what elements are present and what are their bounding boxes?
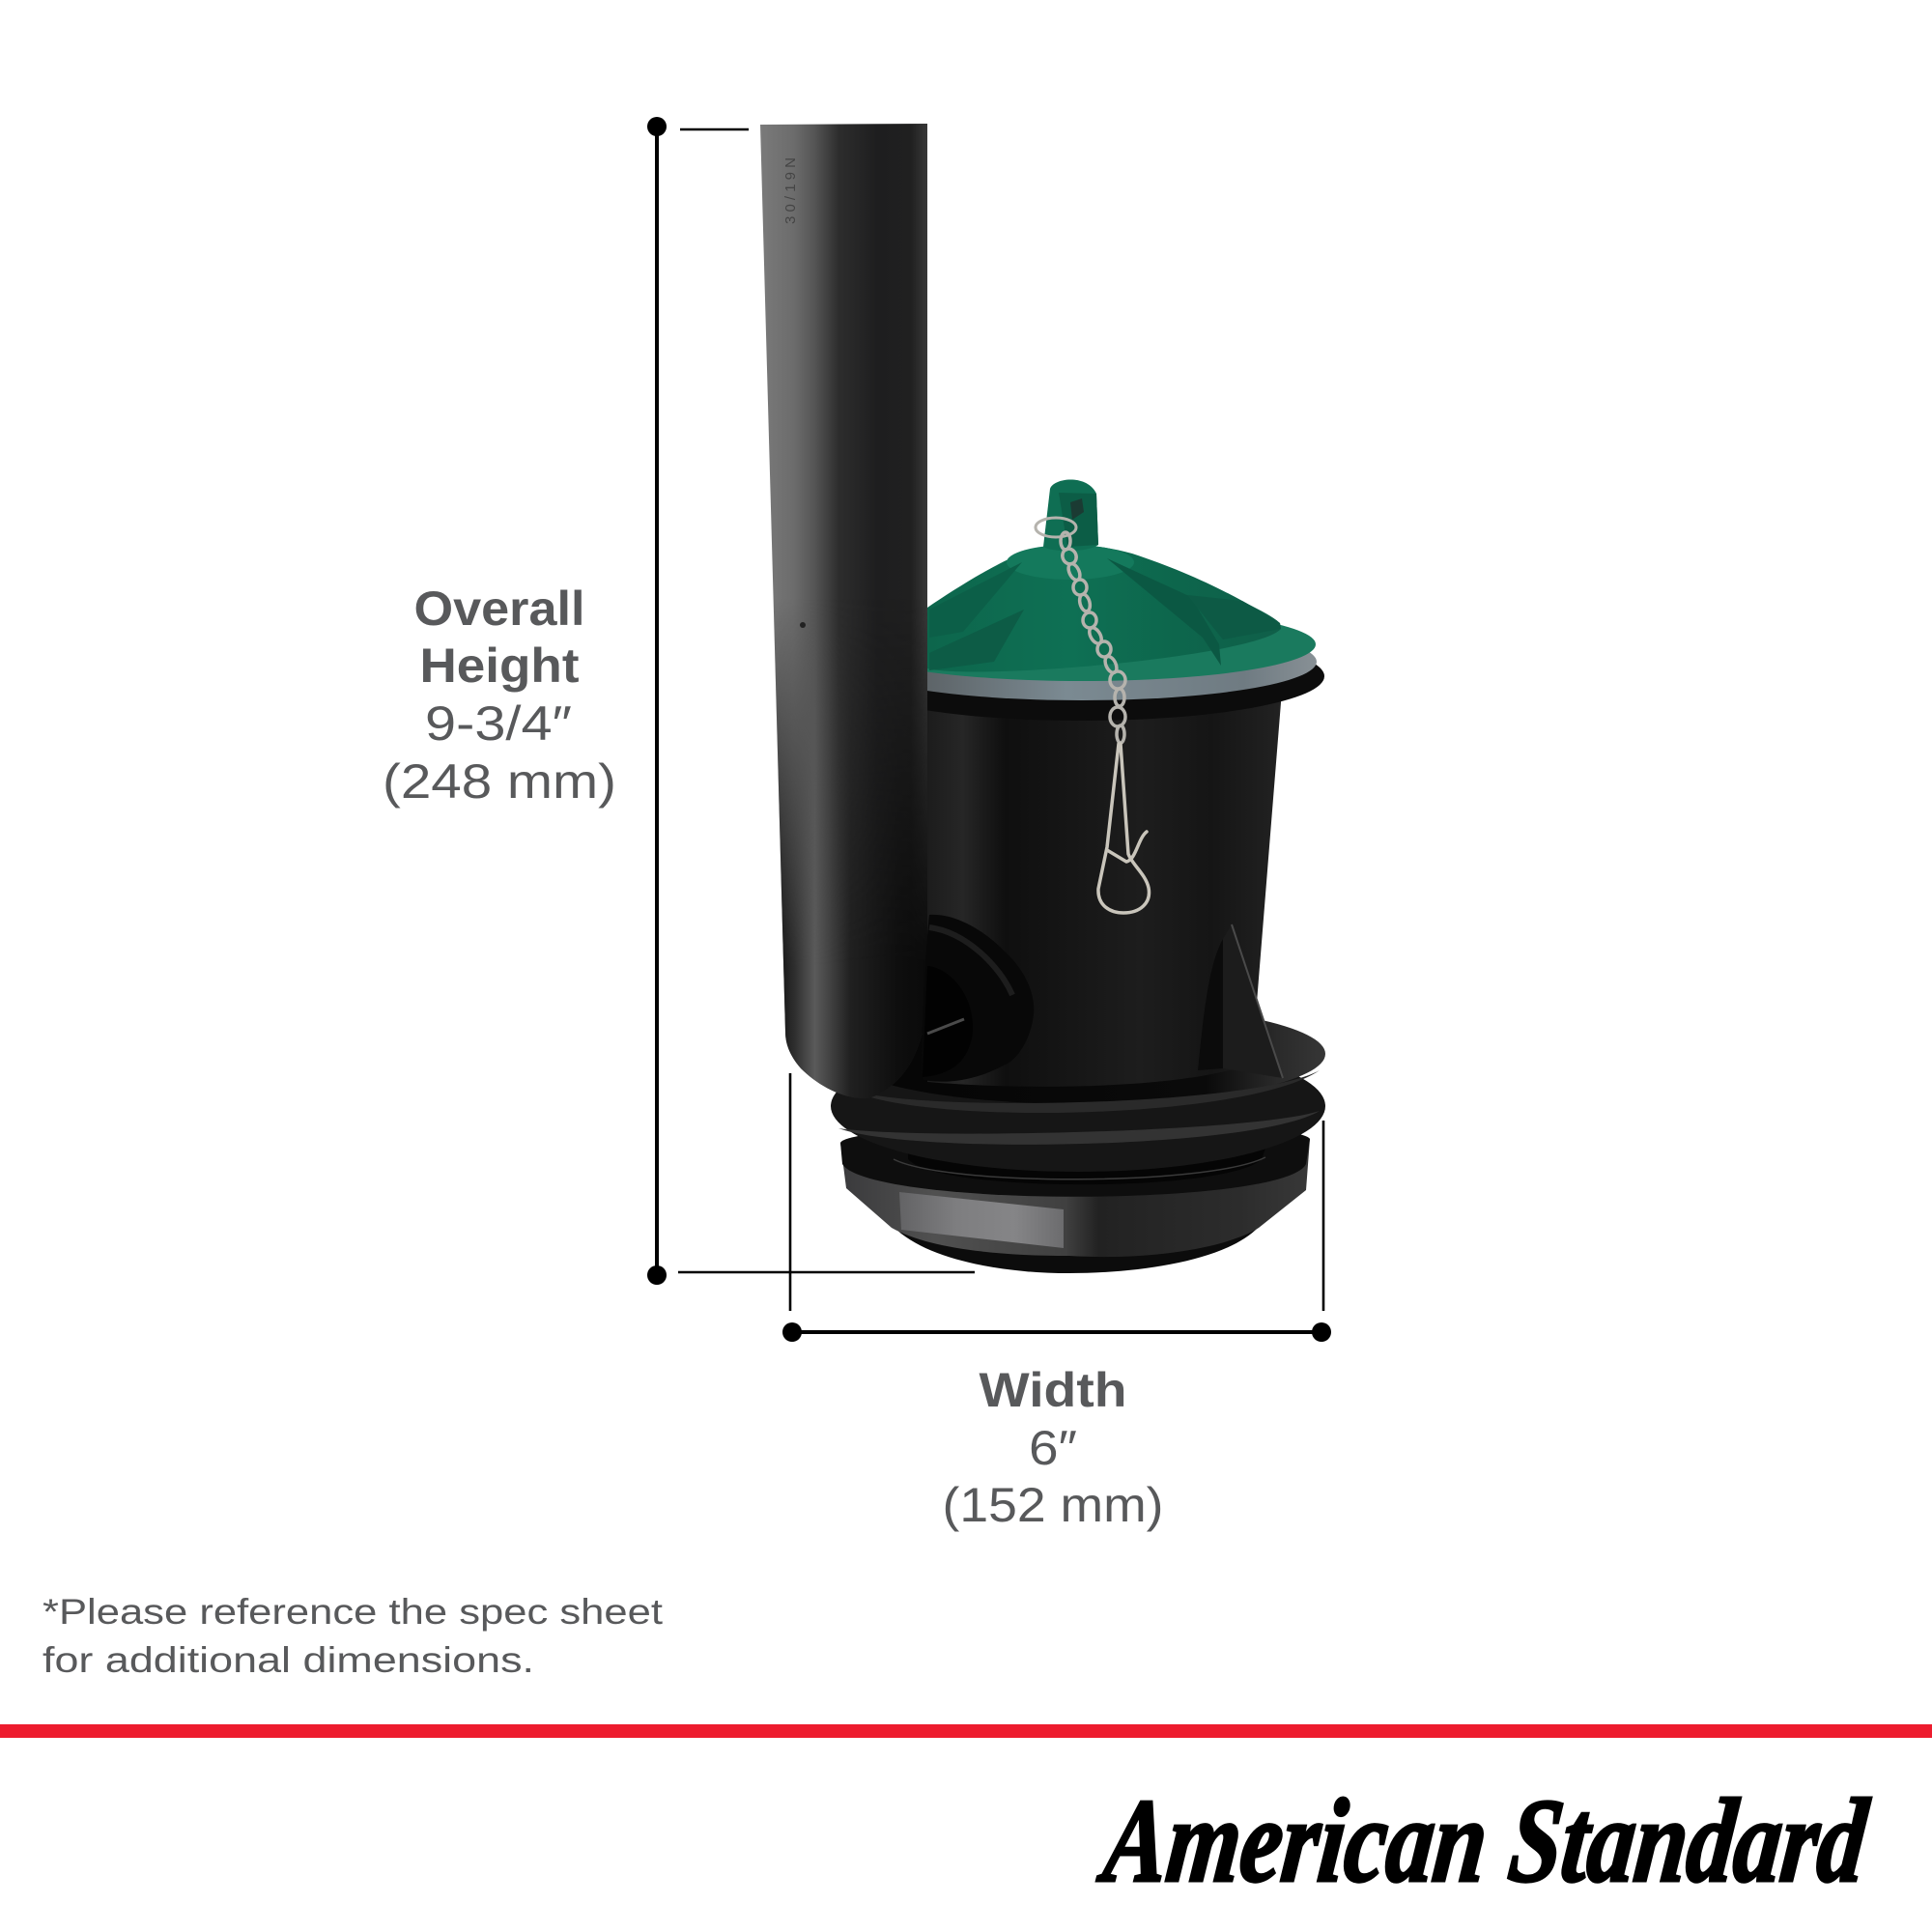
- gasket ring: [831, 1040, 1325, 1172]
- label: width: Width: [980, 1363, 1126, 1417]
- valve base nut: [840, 1123, 1310, 1273]
- label: width: [943, 1363, 1163, 1532]
- lid plateau: [1007, 545, 1134, 580]
- chain clip: [1098, 744, 1149, 913]
- label: overall height: (248 mm): [383, 754, 616, 809]
- right dot: [1312, 1322, 1331, 1342]
- lid rib left: [929, 610, 1024, 670]
- left dot: [782, 1322, 802, 1342]
- label: overall height: Height: [419, 639, 580, 693]
- bottom tick: [678, 1271, 975, 1273]
- product photo: flush valve: [760, 124, 1325, 1273]
- label: overall height: 9-3/4″: [425, 696, 572, 751]
- right tick: [1322, 1121, 1324, 1311]
- base disc: [838, 1004, 1325, 1104]
- label: width: 6″: [1029, 1421, 1077, 1475]
- bottom dot: [647, 1265, 667, 1285]
- dimension: overall height: [647, 117, 975, 1285]
- top tick: [680, 128, 749, 130]
- lid fin right: [1187, 595, 1281, 639]
- footnote: for additional dimensions.: [43, 1640, 534, 1680]
- gasket highlight: [838, 1111, 1320, 1145]
- lid finial: [1043, 479, 1098, 551]
- label: overall height: Overall: [413, 582, 585, 636]
- red divider bar: [0, 1724, 1932, 1738]
- lid rib right: [1107, 558, 1221, 666]
- footnote: [43, 1592, 664, 1680]
- lid ridge left: [929, 562, 1022, 638]
- top dot: [647, 117, 667, 136]
- pipe hole: [800, 622, 806, 628]
- disc lip: [850, 1070, 1320, 1113]
- dimension: width: [782, 1073, 1331, 1342]
- bucket upper rim: [839, 623, 1324, 721]
- left tick: [789, 1073, 791, 1311]
- width line: [792, 1330, 1321, 1334]
- green lid: [848, 479, 1316, 681]
- pipe marking: 30/19N: [782, 155, 799, 224]
- chain: [1036, 518, 1125, 743]
- bucket support triangle: [1198, 924, 1283, 1078]
- elbow connector: [922, 915, 1034, 1082]
- valve bucket: [927, 691, 1282, 1087]
- drain pipe: [760, 124, 927, 1098]
- height line: [655, 127, 659, 1275]
- footnote: *Please reference the spec sheet: [43, 1592, 664, 1632]
- label: overall height: [383, 582, 616, 809]
- label: width: (152 mm): [943, 1478, 1163, 1532]
